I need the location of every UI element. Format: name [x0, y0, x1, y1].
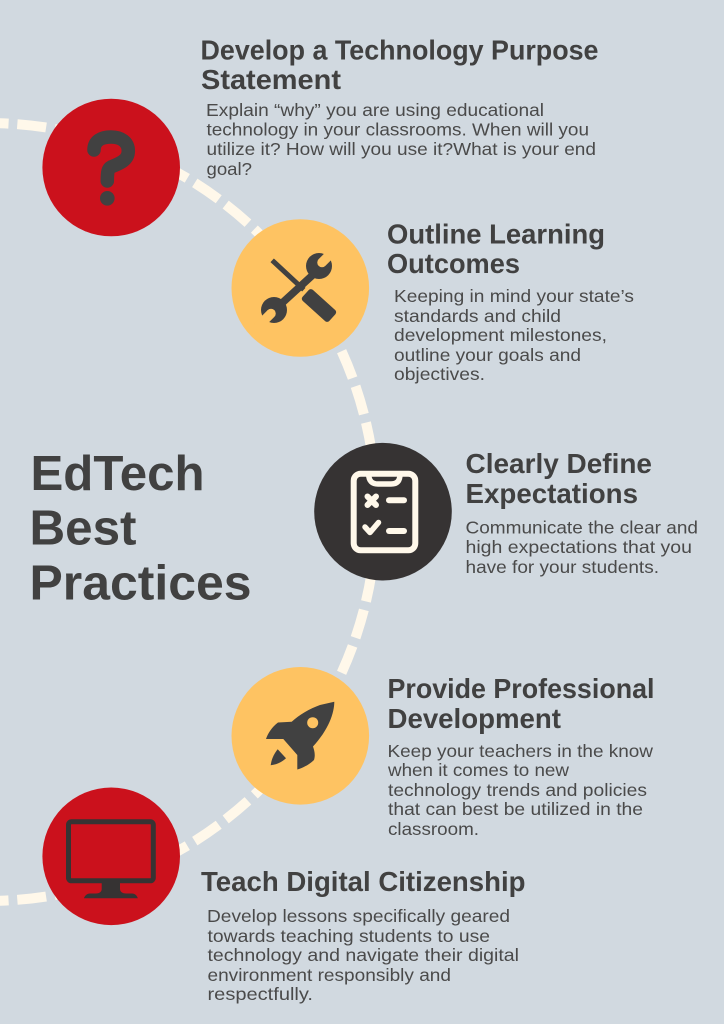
step 1: description — [206, 100, 596, 179]
step 4: heading: Provide Professional — [388, 673, 654, 704]
step 5: description: respectfully. — [208, 984, 313, 1004]
step 5: description: environment responsibly and — [208, 965, 451, 985]
step 4: description — [387, 741, 653, 839]
step 4: description: Keep your teachers in the know — [388, 741, 653, 761]
step 2: description: development milestones, — [394, 325, 607, 345]
step 5: heading: Teach Digital Citizenship — [201, 866, 526, 897]
step 5: description — [207, 906, 519, 1004]
step 1: heading: Develop a Technology Purpose — [200, 34, 598, 66]
step 2: description: outline your goals and — [394, 345, 581, 365]
step 5: description: technology and navigate their digital — [208, 945, 519, 965]
title: EdTech — [30, 447, 204, 501]
step 1: question icon badge — [42, 99, 180, 236]
step 3: heading: Clearly Define — [466, 448, 652, 479]
step 2: description: objectives. — [394, 364, 485, 384]
step 1: description: technology in your classrooms. When will you — [206, 120, 589, 140]
step 3: description: have for your students. — [466, 557, 659, 577]
step 3: description — [466, 518, 698, 577]
step 1: heading — [200, 34, 598, 95]
step 2: description — [394, 286, 634, 384]
step 1: description: utilize it? How will you use it?What is your end — [206, 139, 596, 159]
step 4: heading: Development — [388, 703, 561, 734]
step 5: description: towards teaching students to use — [208, 926, 490, 946]
step 4: rocket icon badge — [231, 667, 369, 805]
step 2: tools icon badge — [231, 219, 369, 357]
step 1: description: goal? — [206, 159, 252, 179]
step 3: heading — [466, 448, 652, 509]
step 3: clipboard icon badge — [314, 443, 452, 580]
step 1: heading: Statement — [201, 64, 341, 95]
step 3: heading: Expectations — [466, 478, 638, 509]
step 2: heading — [387, 218, 605, 279]
step 5: description: Develop lessons specifically geared — [207, 906, 510, 926]
step 2: heading: Outcomes — [387, 248, 520, 279]
step 4: description: technology trends and policies — [388, 780, 647, 800]
step 3: description: high expectations that you — [466, 537, 692, 557]
step 5: monitor icon badge — [42, 788, 180, 925]
title — [30, 447, 252, 610]
step 1: description: Explain “why” you are using educational — [206, 100, 544, 120]
step 4: heading — [388, 673, 654, 734]
step 4: description: classroom. — [388, 819, 479, 839]
step 2: heading: Outline Learning — [387, 218, 605, 250]
step 3: description: Communicate the clear and — [466, 518, 698, 538]
step 4: description: that can best be utilized in the — [388, 799, 643, 819]
dashed arc connecting the steps — [0, 123, 376, 901]
step 2: description: Keeping in mind your state’s — [394, 286, 634, 306]
step 2: description: standards and child — [394, 306, 561, 326]
title: Best — [30, 502, 136, 556]
step 4: description: when it comes to new — [387, 760, 569, 780]
title: Practices — [30, 556, 252, 610]
